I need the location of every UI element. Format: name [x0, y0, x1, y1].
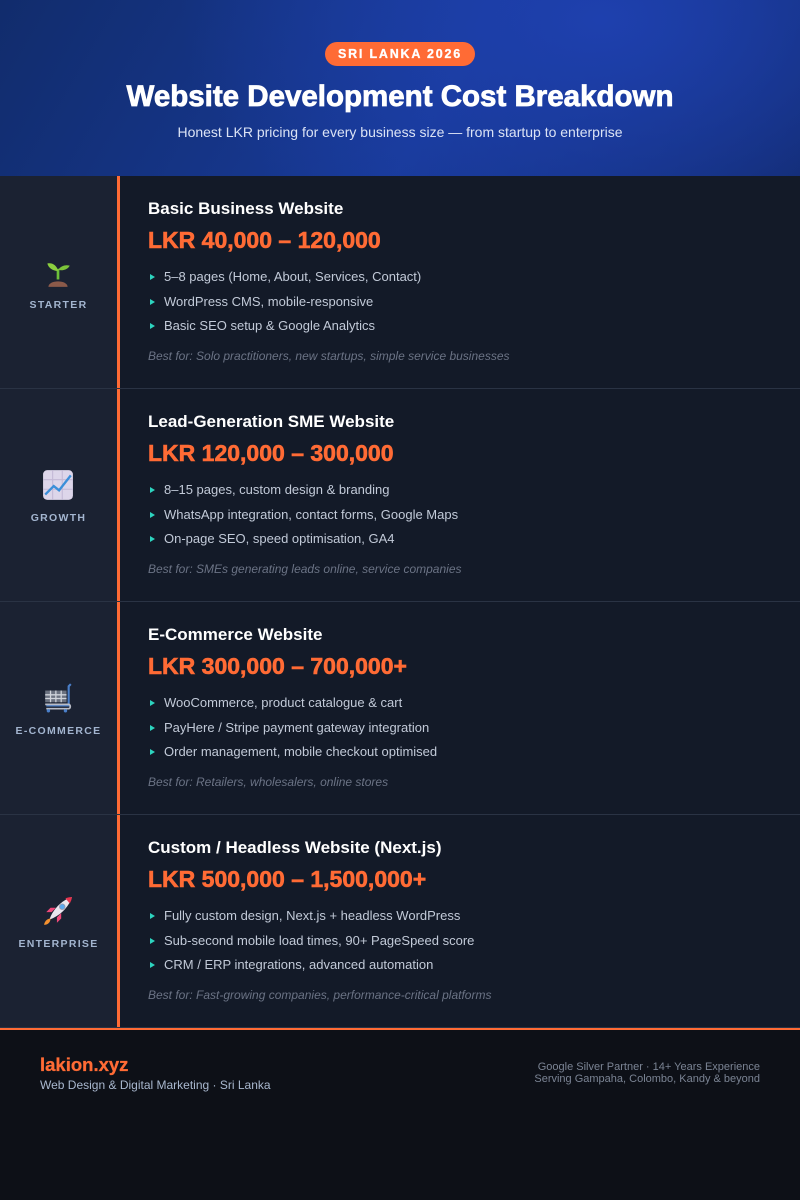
feature list: CRM / ERP integrations, advanced automation — [164, 957, 433, 972]
subtitle: Honest LKR pricing for every business size — from startup to enterprise — [177, 124, 623, 140]
feature list: 5–8 pages (Home, About, Services, Contact) — [164, 269, 421, 284]
credentials: Serving Gampaha, Colombo, Kandy & beyond — [534, 1073, 760, 1085]
heading: Basic Business Website — [148, 199, 343, 218]
label: ENTERPRISE — [18, 938, 99, 950]
brand: lakion.xyz — [40, 1054, 128, 1075]
panel: enterprise — [0, 815, 800, 1028]
footer — [0, 1028, 800, 1200]
header — [0, 0, 800, 176]
badge: SRI LANKA 2026 — [338, 47, 462, 61]
badge — [325, 42, 475, 66]
feature list: PayHere / Stripe payment gateway integration — [164, 720, 429, 734]
feature list — [150, 269, 421, 333]
label: E-COMMERCE — [16, 725, 101, 737]
icon: cart — [45, 684, 72, 712]
feature list: WhatsApp integration, contact forms, Google Maps — [164, 506, 458, 522]
label: GROWTH — [31, 512, 86, 524]
price: LKR 40,000 – 120,000 — [148, 227, 381, 253]
heading: E-Commerce Website — [148, 625, 322, 644]
feature list — [150, 695, 437, 759]
feature list — [150, 908, 474, 972]
feature list — [150, 482, 458, 546]
feature list: WordPress CMS, mobile-responsive — [164, 294, 373, 308]
credentials — [534, 1061, 760, 1085]
panel: growth — [0, 389, 800, 602]
best for: Best for: Solo practitioners, new startups, simple service businesses — [148, 349, 510, 363]
icon: chart — [43, 470, 73, 500]
feature list: 8–15 pages, custom design & branding — [164, 482, 390, 497]
price: LKR 120,000 – 300,000 — [148, 440, 394, 466]
heading: Lead-Generation SME Website — [148, 412, 394, 431]
label: STARTER — [30, 299, 87, 311]
icon: rocket — [44, 897, 72, 925]
icon: seedling — [47, 263, 70, 287]
feature list: Order management, mobile checkout optimised — [164, 744, 437, 759]
feature list: Sub-second mobile load times, 90+ PageSpeed score — [164, 932, 474, 948]
title: Website Development Cost Breakdown — [127, 80, 673, 113]
heading: Custom / Headless Website (Next.js) — [148, 838, 442, 857]
credentials: Google Silver Partner · 14+ Years Experience — [538, 1061, 760, 1073]
best for: Best for: SMEs generating leads online, service companies — [148, 562, 462, 576]
feature list: WooCommerce, product catalogue & cart — [164, 695, 402, 710]
feature list: Fully custom design, Next.js + headless WordPress — [164, 908, 460, 923]
feature list: On-page SEO, speed optimisation, GA4 — [164, 531, 395, 546]
feature list: Basic SEO setup & Google Analytics — [164, 318, 375, 333]
panel: e-commerce — [0, 602, 800, 815]
price: LKR 300,000 – 700,000+ — [148, 653, 407, 679]
panel: starter — [0, 176, 800, 389]
best for: Best for: Retailers, wholesalers, online stores — [148, 775, 388, 789]
tagline: Web Design & Digital Marketing · Sri Lanka — [40, 1078, 271, 1092]
price: LKR 500,000 – 1,500,000+ — [148, 866, 426, 892]
best for: Best for: Fast-growing companies, performance-critical platforms — [148, 988, 491, 1002]
